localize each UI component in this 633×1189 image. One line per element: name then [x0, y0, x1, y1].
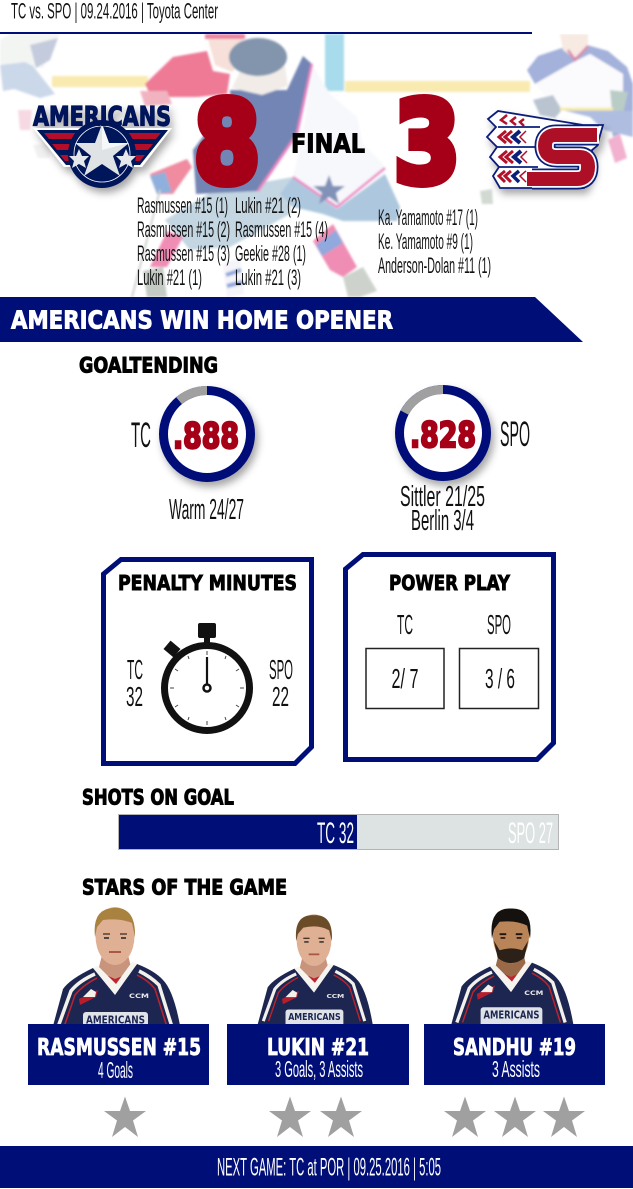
goal scorers: Americans: Lukin #21 (1) [137, 265, 202, 290]
TC power play box [366, 648, 444, 708]
goalie lines: Sittler and Berlin: Sittler 21/25 [400, 481, 485, 513]
panel title: POWER PLAY [389, 571, 511, 595]
card: Lukin [227, 1024, 409, 1085]
panel: penalty minutes: SPO [269, 654, 293, 685]
player photo: Lukin: AMERICANS [288, 1012, 341, 1023]
SPO power play box: 3 / 6 [485, 663, 515, 694]
TC penalty minutes: 32 [126, 681, 143, 712]
player photo: Sandhu: AMERICANS [483, 1010, 540, 1022]
chart: shots on goal bar [118, 814, 558, 850]
goal scorers: Americans: Rasmussen #15 (2) [137, 217, 230, 242]
goalie lines: Sittler and Berlin [400, 481, 485, 537]
card: Sandhu [424, 1024, 605, 1085]
label: final: FINAL [291, 130, 365, 160]
chart: TC save percentage ring: .888 [173, 417, 239, 457]
logo: Tri-City Americans [33, 102, 172, 188]
player photo: Rasmussen [50, 907, 182, 1038]
headline banner: AMERICANS WIN HOME OPENER [11, 306, 393, 334]
card: Lukin: LUKIN #21 [267, 1033, 369, 1061]
SPO penalty minutes [269, 654, 293, 712]
text: SPO 27 [508, 817, 553, 850]
panel: penalty minutes [104, 560, 312, 764]
heading: stars of the game: STARS OF THE GAME [82, 876, 287, 900]
panel: power play: TC [397, 609, 413, 640]
chart: TC save percentage ring [164, 390, 250, 478]
goal scorers: Americans: Rasmussen #15 (3) [137, 241, 230, 266]
text: Rasmussen #15 (4) [235, 217, 328, 242]
card: Lukin: 3 Goals, 3 Assists [275, 1056, 363, 1082]
header rule [0, 32, 532, 34]
headline banner [0, 297, 583, 342]
chart: SPO save percentage ring: .828 [410, 416, 476, 456]
goal scorers: Americans: Geekie #28 (1) [235, 241, 306, 266]
background photo: hockey players [0, 34, 633, 297]
icon: one star [104, 1096, 146, 1137]
heading: shots on goal: SHOTS ON GOAL [82, 786, 234, 810]
panel: power play [346, 554, 554, 760]
text: SPO [500, 415, 530, 454]
panel: power play: SPO [487, 609, 511, 640]
icon: stopwatch [163, 623, 250, 730]
score: Chiefs 3: 3 [394, 79, 460, 209]
player photo: Sandhu [449, 908, 575, 1033]
icons: three stars [444, 1096, 585, 1137]
card: Sandhu: SANDHU #19 [453, 1033, 576, 1061]
TC power play box: 2/ 7 [392, 663, 418, 694]
goal scorers: Americans: Rasmussen #15 (1) [137, 193, 228, 218]
goal scorers: Americans: Lukin #21 (2) [235, 193, 301, 218]
panel title: PENALTY MINUTES [118, 571, 297, 595]
text: TC [131, 416, 151, 455]
icons: two stars [269, 1096, 362, 1137]
goal scorers: Americans [137, 193, 328, 290]
card: Rasmussen: RASMUSSEN #15 [37, 1033, 201, 1061]
chart: shots on goal bar: TC 32 [317, 817, 354, 850]
card: Rasmussen [28, 1024, 209, 1085]
text: Warm 24/27 [169, 494, 244, 526]
TC penalty minutes [126, 654, 143, 712]
card: Rasmussen: 4 Goals [98, 1057, 133, 1083]
logo: Tri-City Americans: AMERICANS [33, 102, 171, 132]
goal scorers: Chiefs [378, 205, 491, 278]
goalie lines: Sittler and Berlin: Berlin 3/4 [411, 505, 474, 537]
player photo: Sandhu: CCM [524, 991, 544, 997]
text: Anderson-Dolan #11 (1) [378, 253, 491, 278]
chart: SPO save percentage ring [400, 390, 486, 476]
heading: goaltending: GOALTENDING [79, 354, 218, 378]
score: Americans 8: 8 [194, 79, 260, 209]
player photo: Rasmussen: CCM [129, 993, 149, 1000]
logo: Spokane Chiefs [487, 111, 603, 188]
SPO penalty minutes: 22 [272, 681, 289, 712]
player photo: Lukin: CCM [326, 994, 344, 1000]
panel: penalty minutes: TC [127, 654, 143, 685]
footer: next game [0, 1146, 633, 1188]
player photo: Lukin [256, 914, 374, 1031]
card: Sandhu: 3 Assists [492, 1056, 540, 1082]
goal scorers: Americans: Lukin #21 (3) [235, 265, 301, 290]
goal scorers: Chiefs: Ke. Yamamoto #9 (1) [378, 229, 473, 254]
player photo: Rasmussen: AMERICANS [86, 1014, 145, 1026]
goal scorers: Chiefs: Ka. Yamamoto #17 (1) [378, 205, 478, 230]
SPO power play box [460, 648, 538, 708]
